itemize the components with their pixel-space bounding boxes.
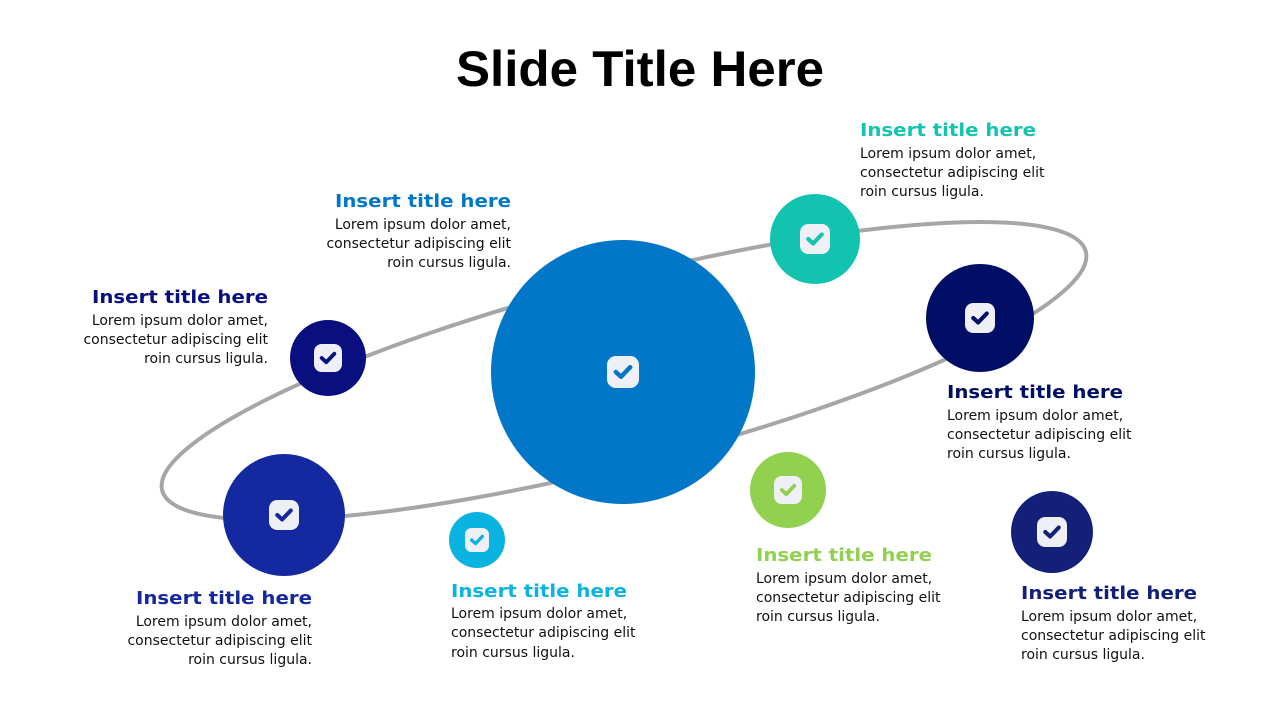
- text: cyan: Insert title here: [451, 581, 627, 602]
- text: bottom-left: [127, 588, 313, 668]
- text: teal: [860, 120, 1045, 200]
- text: left: consectetur adipiscing elit: [83, 332, 269, 348]
- text: teal: consectetur adipiscing elit: [860, 165, 1045, 181]
- text: center top: Insert title here: [335, 191, 511, 212]
- text: navy right: [947, 382, 1132, 462]
- node: cyan: [449, 512, 505, 568]
- node: green: [750, 452, 826, 528]
- text: cyan: roin cursus ligula.: [451, 645, 575, 661]
- text: bottom-left: Lorem ipsum dolor amet,: [136, 614, 312, 630]
- node: teal: [770, 194, 860, 284]
- node: blue bottom-left: [223, 454, 345, 576]
- text: center top: Lorem ipsum dolor amet,: [335, 217, 511, 233]
- text: green: Insert title here: [756, 545, 932, 566]
- text: navy right: consectetur adipiscing elit: [947, 427, 1132, 443]
- text: navy right: roin cursus ligula.: [947, 446, 1071, 462]
- text: bottom-right: Lorem ipsum dolor amet,: [1021, 609, 1197, 625]
- text: navy right: Insert title here: [947, 382, 1123, 403]
- text: bottom-right: [1021, 583, 1206, 663]
- node: navy right: [926, 264, 1034, 372]
- text: green: consectetur adipiscing elit: [756, 590, 941, 606]
- text: green: roin cursus ligula.: [756, 609, 880, 625]
- text: bottom-left: Insert title here: [136, 588, 312, 609]
- text: teal: roin cursus ligula.: [860, 184, 984, 200]
- orbit ellipse: [139, 162, 1109, 580]
- text: center top: [326, 191, 512, 271]
- text: green: Lorem ipsum dolor amet,: [756, 571, 932, 587]
- text: center top: roin cursus ligula.: [387, 255, 511, 271]
- node: navy bottom-right: [1011, 491, 1093, 573]
- text: left: [83, 287, 269, 367]
- node: dark blue left: [290, 320, 366, 396]
- text: left: roin cursus ligula.: [144, 351, 268, 367]
- text: teal: Lorem ipsum dolor amet,: [860, 146, 1036, 162]
- text: bottom-left: roin cursus ligula.: [188, 652, 312, 668]
- text: cyan: consectetur adipiscing elit: [451, 625, 636, 641]
- title: Slide Title Here: [456, 41, 824, 97]
- text: green: [756, 545, 941, 625]
- text: left: Insert title here: [92, 287, 268, 308]
- text: navy right: Lorem ipsum dolor amet,: [947, 408, 1123, 424]
- text: bottom-right: consectetur adipiscing elit: [1021, 628, 1206, 644]
- text: teal: Insert title here: [860, 120, 1036, 141]
- text: center top: consectetur adipiscing elit: [326, 236, 512, 252]
- text: cyan: [451, 581, 636, 661]
- text: bottom-right: roin cursus ligula.: [1021, 647, 1145, 663]
- text: left: Lorem ipsum dolor amet,: [92, 313, 268, 329]
- text: bottom-right: Insert title here: [1021, 583, 1197, 604]
- text: cyan: Lorem ipsum dolor amet,: [451, 606, 627, 622]
- center planet: [491, 240, 755, 504]
- text: bottom-left: consectetur adipiscing elit: [127, 633, 313, 649]
